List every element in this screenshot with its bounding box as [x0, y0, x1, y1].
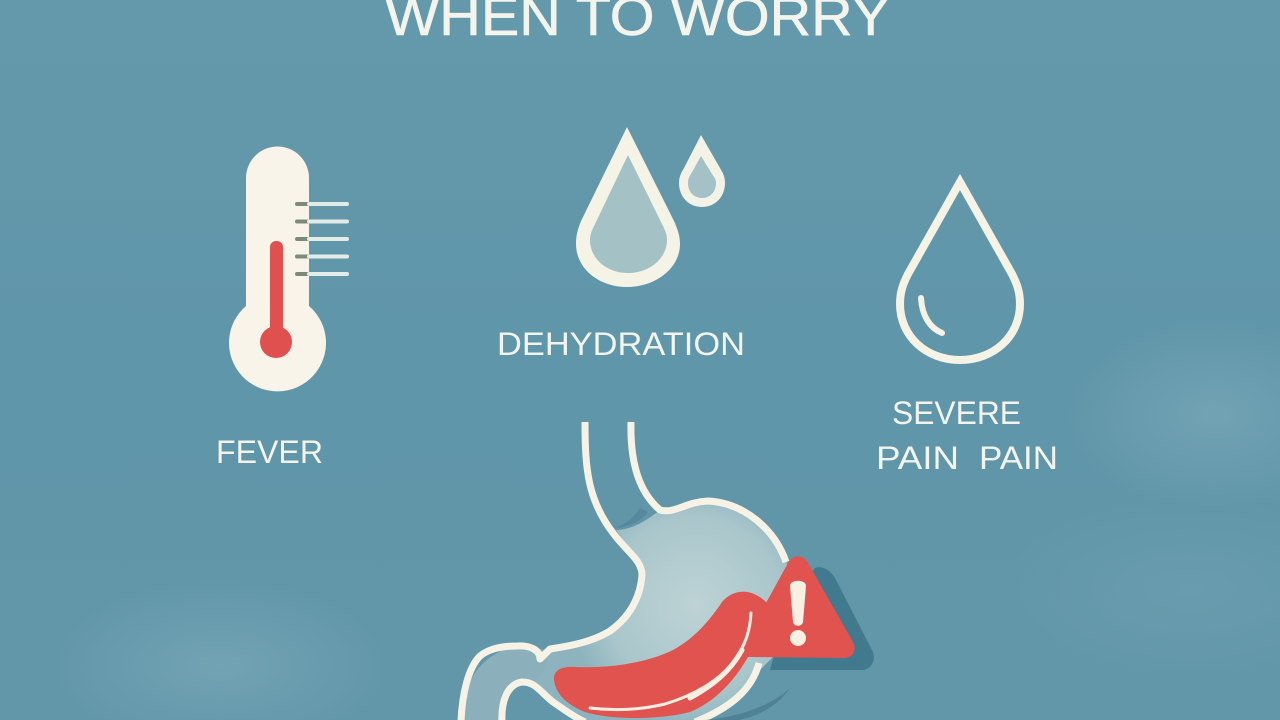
- label: severe pain: [876, 395, 1058, 476]
- exclamation mark: [790, 581, 806, 646]
- icon: small water drop: [679, 135, 725, 207]
- icon: thermometer: [229, 147, 347, 391]
- label: severe pain: PAIN: [876, 440, 959, 476]
- label: fever: FEVER: [216, 434, 323, 470]
- lower gut shade: [462, 646, 548, 720]
- label: severe pain: PAIN: [979, 440, 1058, 476]
- label: severe pain: SEVERE: [892, 395, 1021, 431]
- stomach fill: [462, 501, 790, 720]
- stomach outline: [461, 422, 786, 720]
- ground shadow: [705, 688, 790, 720]
- thermometer scale ticks: [297, 204, 347, 274]
- label: dehydration: DEHYDRATION: [497, 326, 745, 362]
- esophagus shadow: [614, 508, 648, 528]
- warning triangle: [748, 556, 855, 658]
- red highlight line: [590, 613, 751, 710]
- red inflamed area: [554, 592, 767, 718]
- warning triangle shadow: [770, 567, 874, 670]
- thermometer mercury: [260, 241, 292, 358]
- illustration: stomach with warning: [461, 422, 874, 720]
- icon: large water drop: [576, 127, 680, 287]
- icon: outlined drop: [900, 182, 1020, 360]
